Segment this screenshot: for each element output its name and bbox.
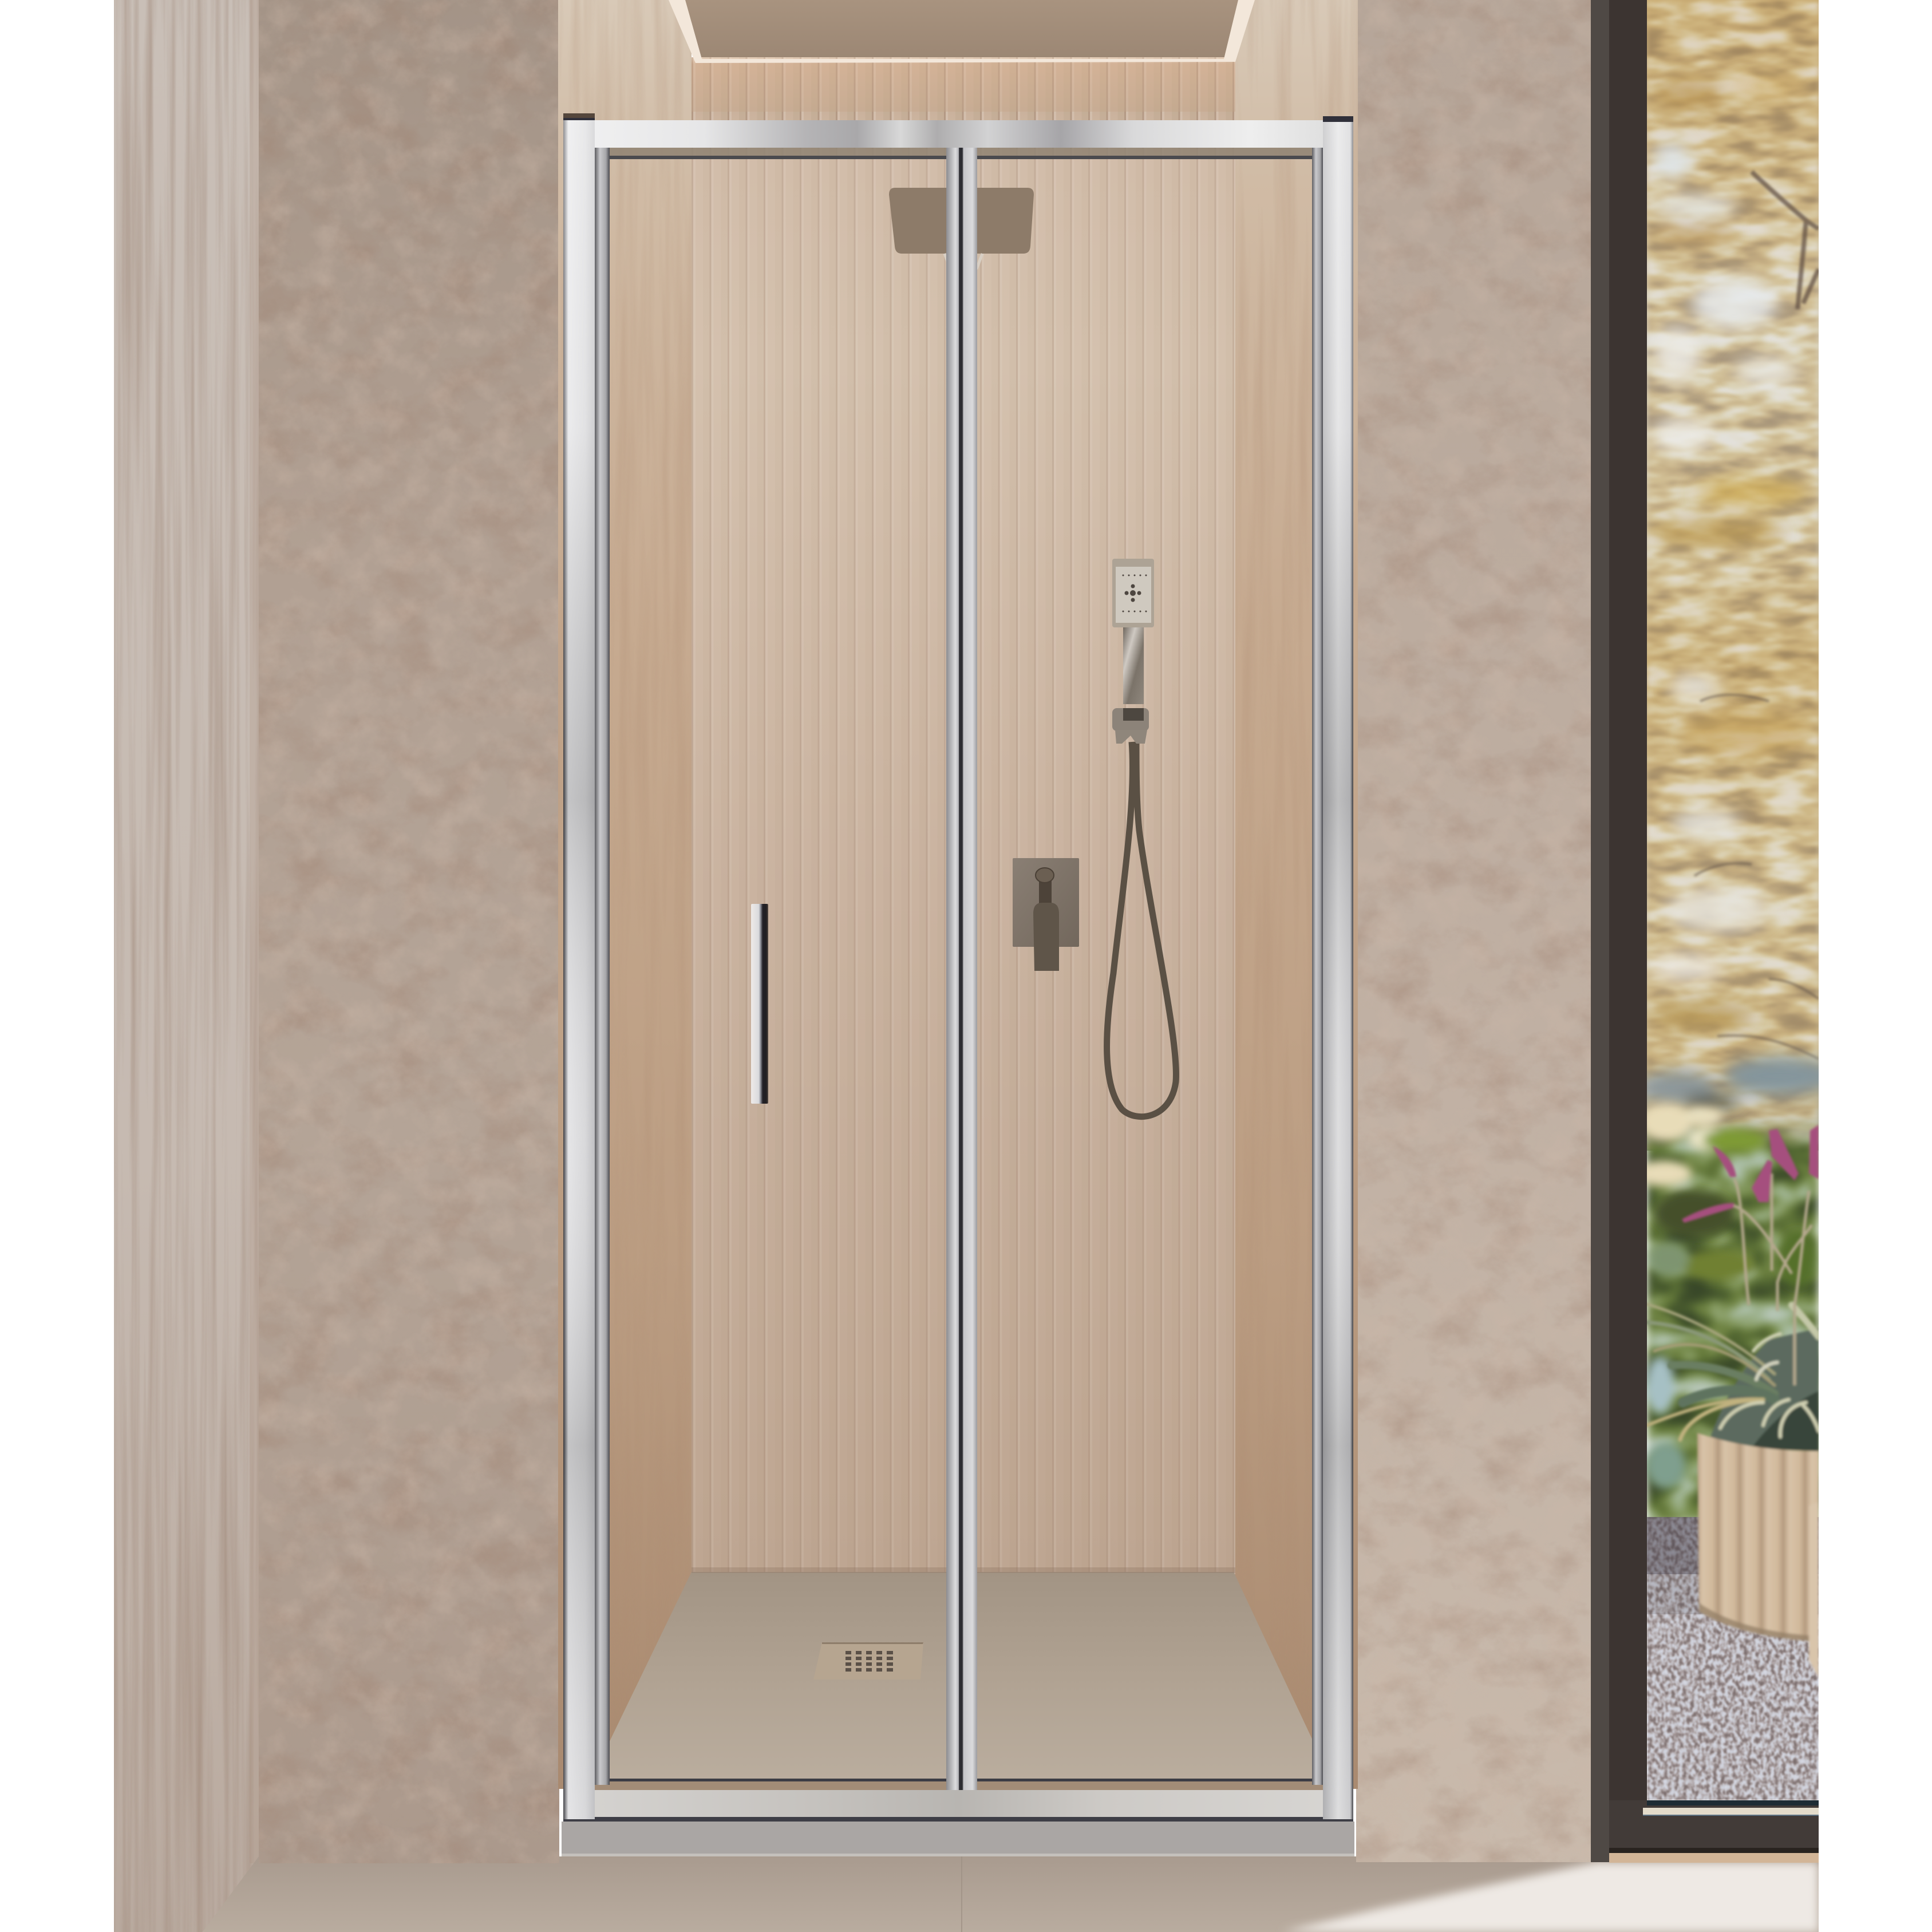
threshold <box>562 1822 1354 1856</box>
gravel ground <box>1647 1517 1819 1800</box>
hose loop <box>1107 742 1176 1117</box>
panel: floor <box>203 1849 1853 1932</box>
panel: left reveal of the niche <box>558 0 692 1789</box>
top rail <box>595 120 1323 148</box>
rosette shadow foliage <box>1709 1328 1819 1451</box>
panel: shower tray <box>591 1567 1332 1780</box>
panel: fluted back wall <box>692 57 1235 1574</box>
pink flower spikes <box>1682 1125 1819 1223</box>
panel: left plaster wall <box>259 0 559 1863</box>
autumn tree canopy <box>1647 0 1819 1151</box>
flower stems <box>1729 1174 1812 1385</box>
bottom rail <box>595 1790 1323 1817</box>
icon: overhead rain shower head <box>889 188 1034 269</box>
icon: door pull handle <box>751 904 768 1104</box>
centre mullion <box>946 148 977 1790</box>
handle <box>1123 627 1144 704</box>
bottom track <box>595 1779 1323 1781</box>
grass blades <box>1647 1304 1775 1440</box>
right inner track <box>1312 148 1323 1785</box>
icon: hand shower and hose <box>1107 559 1176 1117</box>
icon: floor drain <box>813 1642 923 1680</box>
wall holder <box>1112 708 1149 731</box>
panel: garden view through window <box>1647 0 1819 1800</box>
second planter edge <box>1809 1502 1819 1677</box>
green shrubs <box>1634 1104 1819 1523</box>
potted plant <box>1647 1125 1819 1677</box>
left post <box>563 113 595 120</box>
panel: fluted left column <box>114 0 259 1932</box>
right post <box>1323 116 1353 122</box>
panel: shower door frame <box>562 113 1354 1856</box>
panel: right plaster wall <box>1356 0 1591 1862</box>
panel: right reveal of the niche <box>1235 0 1358 1789</box>
left inner track <box>595 148 610 1785</box>
icon: wall mixer valve <box>1013 858 1079 971</box>
fluted planter <box>1697 1433 1819 1642</box>
top shadow band <box>595 148 1323 156</box>
distant grey hedge band <box>1637 1057 1838 1109</box>
panel: dark window frame <box>1591 0 1932 1932</box>
panel: recessed ceiling with light strip <box>669 0 1255 149</box>
spray head <box>1112 559 1154 627</box>
